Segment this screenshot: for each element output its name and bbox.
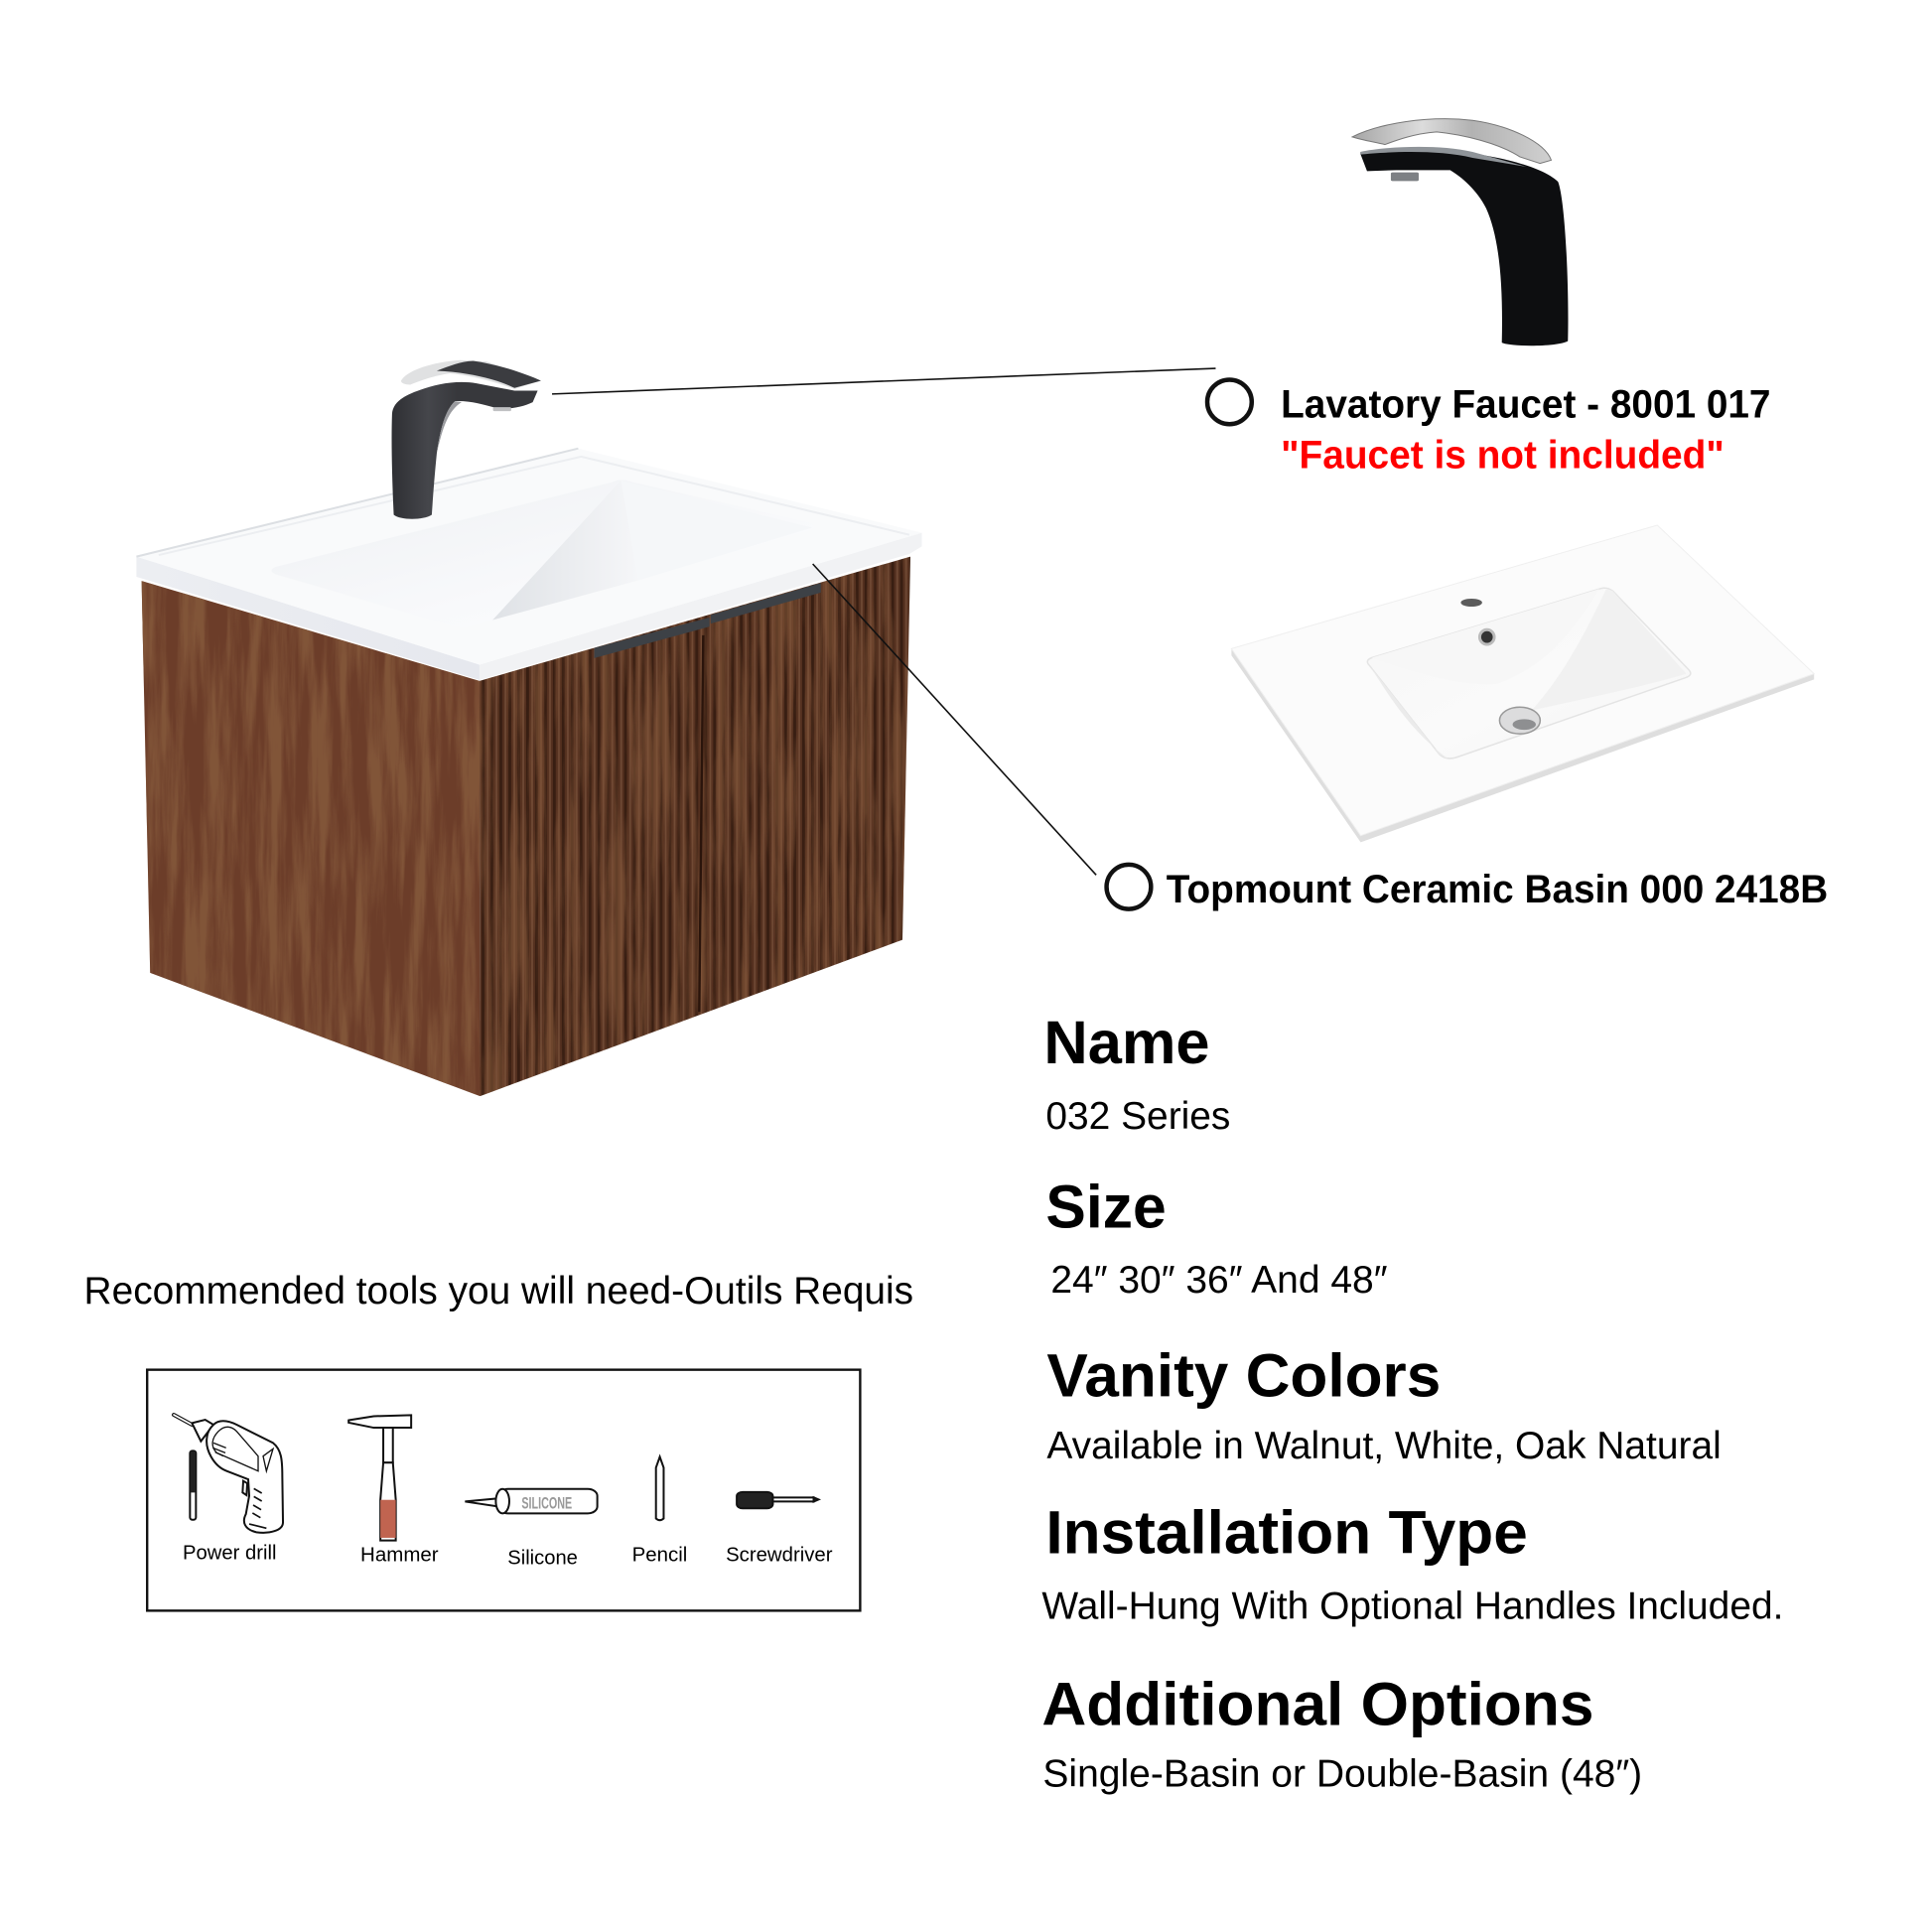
tool icons (348, 1415, 818, 1541)
tool label: pencil: Pencil (632, 1545, 687, 1567)
faucet label: Lavatory Faucet - 8001 017 (1281, 383, 1770, 427)
mounted faucet (392, 360, 541, 519)
vanity product illustration (133, 449, 922, 1102)
basin bowl (1367, 588, 1691, 759)
heading: installation type: Installation Type (1045, 1499, 1528, 1568)
faucet detail image (1352, 119, 1568, 345)
text: colors value: Available in Walnut, White, Oak Natural (1046, 1425, 1722, 1467)
icon: pencil (656, 1456, 663, 1520)
basin label: Topmount Ceramic Basin 000 2418B (1167, 868, 1828, 911)
overflow (1479, 629, 1494, 644)
leader line to faucet (552, 368, 1215, 394)
chrome lever (401, 360, 541, 389)
heading: additional options: Additional Options (1041, 1671, 1593, 1739)
aerator (1391, 173, 1419, 181)
door divider (699, 635, 703, 1012)
text: options value: Single-Basin or Double-Basin (48″) (1042, 1752, 1642, 1795)
tool label: screwdriver: Screwdriver (726, 1545, 833, 1567)
faucet hole (1460, 599, 1482, 607)
heading: name: Name (1043, 1009, 1210, 1077)
tool label: hammer: Hammer (360, 1545, 439, 1567)
cabinet side face (133, 574, 486, 1102)
icon: silicone tube (465, 1489, 598, 1513)
page content (84, 119, 1828, 1795)
panel: tools box (147, 1370, 860, 1610)
drain (1499, 707, 1540, 734)
basin marker circle (1107, 865, 1151, 909)
door handles (595, 583, 821, 658)
tool label: power drill: Power drill (183, 1543, 277, 1565)
icon: power drill (174, 1415, 283, 1533)
tools heading: Recommended tools you will need-Outils Requis (84, 1270, 913, 1312)
faucet not included note: "Faucet is not included" (1281, 433, 1725, 477)
faucet marker circle (1207, 379, 1252, 424)
faucet body (392, 382, 538, 519)
tool label: silicone: Silicone (507, 1548, 578, 1570)
inner highlight (437, 401, 462, 454)
heading: size: Size (1045, 1173, 1167, 1241)
counter top (136, 449, 922, 665)
counter left edge (136, 557, 480, 680)
basin edge (1231, 525, 1814, 842)
icon: silicone tube: SILICONE (521, 1494, 572, 1512)
heading: vanity colors: Vanity Colors (1046, 1342, 1441, 1411)
text: name value: 032 Series (1045, 1095, 1230, 1138)
icon: hammer (348, 1415, 411, 1541)
counter back lip (159, 457, 909, 555)
spout top strip (1360, 147, 1527, 167)
text: size value: 24″ 30″ 36″ And 48″ (1050, 1259, 1388, 1302)
counter right edge (480, 533, 922, 680)
counter rim (136, 449, 578, 557)
infographic canvas (87, 118, 1827, 1795)
aerator (493, 407, 511, 411)
cabinet front doors (470, 549, 920, 1102)
icon: screwdriver (737, 1492, 818, 1508)
ceramic basin detail image (1231, 525, 1814, 842)
chrome lever (1352, 119, 1551, 164)
faucet body (1360, 149, 1568, 345)
leader line to basin (813, 564, 1096, 875)
basin top (1231, 525, 1814, 836)
text: installation value: Wall-Hung With Optional Handles Included. (1041, 1585, 1783, 1627)
lever dark inlay (437, 360, 541, 388)
basin bowl (271, 480, 815, 627)
